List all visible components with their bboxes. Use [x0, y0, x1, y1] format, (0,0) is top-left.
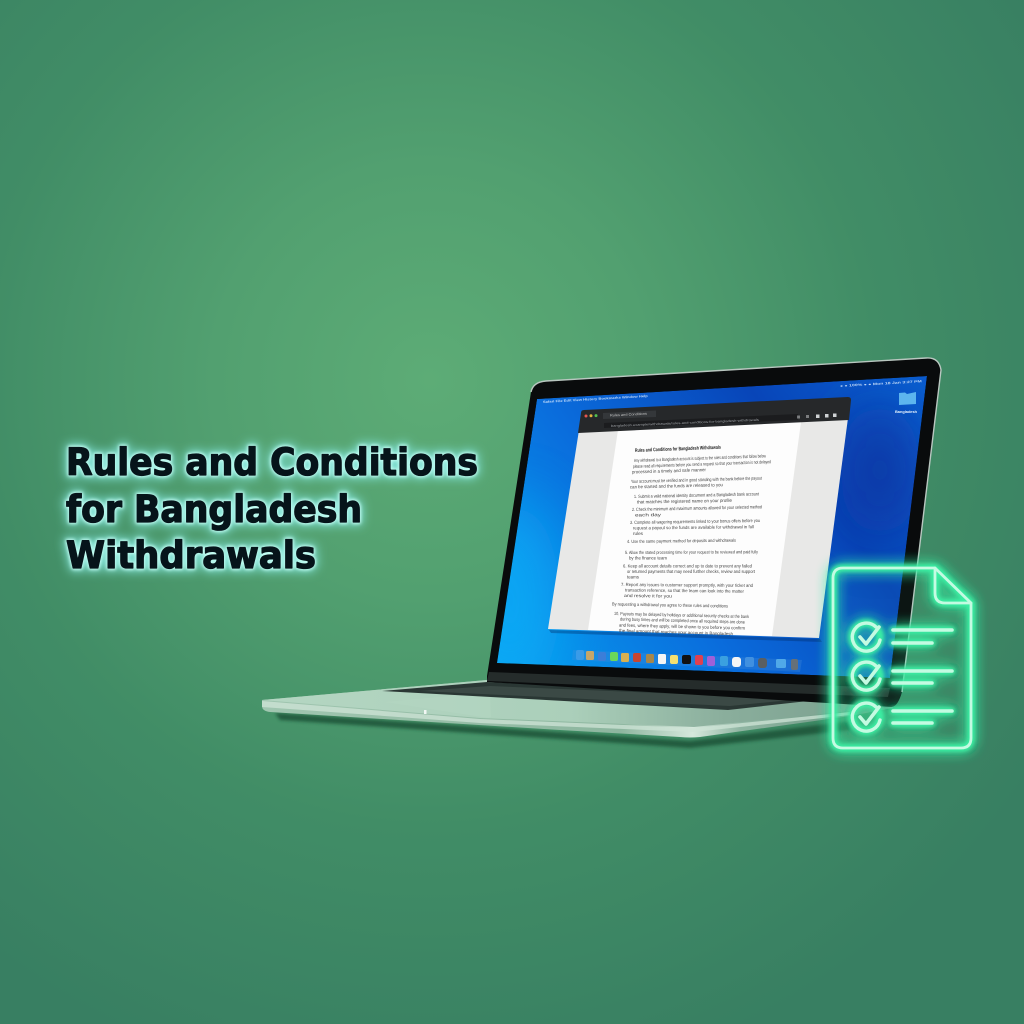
document text: 3. Complete all wagering requirements linked to your bonus offers before you	[630, 518, 760, 525]
document text: the final amount that reaches your account in Bangladesh	[619, 628, 734, 636]
document text: each day	[635, 512, 662, 517]
document text: teams	[627, 574, 640, 580]
desktop folder	[895, 392, 917, 414]
document text: by the finance team	[629, 556, 667, 560]
document text: please read all requirements before you send a request so that your transaction is not delayed	[633, 459, 771, 469]
address bar	[604, 414, 798, 428]
desktop folder: Bangladesh	[895, 410, 917, 414]
document text: and resolve it for you	[624, 593, 673, 599]
laptop	[262, 358, 941, 748]
document text: request a payout so the funds are available for withdrawal in full	[633, 524, 754, 530]
browser window: bangladesh.example/withdrawals/rules-and-conditions-for-bangladesh-withdrawals	[611, 418, 759, 428]
document text: 6. Keep all account details correct and up to date to prevent any failed	[623, 564, 752, 568]
document text	[612, 445, 771, 636]
title: for Bangladesh	[66, 488, 362, 531]
browser chrome	[578, 397, 851, 433]
laptop base	[262, 680, 893, 738]
document text: 2. Check the minimum and maximum amounts allowed for your selected method	[632, 504, 762, 512]
document text: or returned payments that may need further checks, review and support	[627, 569, 756, 574]
document text: rules	[633, 531, 644, 536]
document sheet	[588, 422, 801, 636]
document text: 7. Report any issues to customer support promptly, with your ticket and	[621, 582, 753, 588]
lid rim highlight	[531, 358, 941, 692]
document text: that matches the registered name on your profile	[637, 498, 732, 504]
document text: 5. Allow the stated processing time for your request to be reviewed and paid fully	[625, 549, 759, 555]
page background	[548, 418, 848, 638]
title: for Bangladesh	[66, 488, 362, 531]
window controls	[584, 414, 598, 418]
check item 1	[852, 623, 952, 651]
menu bar: ● ● 100% ● ● Mon 18 Jan 3:27 PM	[840, 379, 922, 388]
document text: during busy times and will be completed once all required steps are done	[620, 617, 745, 625]
icon: glowing checklist document	[833, 568, 971, 748]
base notch	[424, 710, 426, 714]
title: Withdrawals	[66, 534, 316, 577]
document text: processed in a timely and safe manner	[632, 467, 706, 474]
document text: By requesting a withdrawal you agree to these rules and conditions	[612, 602, 729, 609]
check item 3	[852, 703, 952, 731]
document text: and fees, where they apply, will be shown to you before you confirm	[619, 623, 745, 631]
document text: 10. Payouts may be delayed by holidays or additional security checks at the bank	[614, 611, 750, 619]
title: Rules and Conditions	[66, 441, 478, 484]
title: for Bangladesh	[66, 488, 362, 531]
document text: 4. Use the same payment method for deposits and withdrawals	[627, 538, 737, 544]
title: Rules and Conditions	[66, 441, 478, 484]
check item 2	[852, 662, 952, 690]
title: Rules and Conditions	[66, 441, 478, 484]
title: Withdrawals	[66, 534, 316, 577]
browser window	[548, 397, 851, 642]
dock	[572, 650, 802, 672]
active tab	[603, 410, 656, 419]
document text: Any withdrawal to a Bangladesh account is subject to the rules and conditions that follow below	[634, 453, 766, 463]
menu bar: Safari File Edit View History Bookmarks Window Help	[543, 394, 648, 404]
window shadow	[549, 630, 822, 642]
laptop lid	[487, 358, 941, 707]
document text: can be started and the funds are released to you	[630, 482, 723, 489]
title	[66, 441, 478, 577]
document text: Your account must be verified and in good standing with the bank before the payout	[631, 476, 763, 484]
title: Withdrawals	[66, 534, 316, 577]
document outline	[833, 568, 971, 748]
document tint	[833, 568, 971, 748]
screen	[497, 376, 927, 678]
browser window: Rules and Conditions	[610, 412, 647, 417]
document text: transaction reference, so that the team can look into the matter	[625, 588, 745, 594]
document text: 1. Submit a valid national identity document and a Bangladesh bank account	[634, 491, 760, 499]
laptop shadow	[275, 713, 850, 748]
document text: Rules and Conditions for Bangladesh Withdrawals	[635, 445, 721, 454]
toolbar icons	[797, 414, 836, 418]
lower bezel	[487, 672, 890, 697]
menu bar	[543, 379, 922, 404]
icon glow	[833, 568, 971, 748]
